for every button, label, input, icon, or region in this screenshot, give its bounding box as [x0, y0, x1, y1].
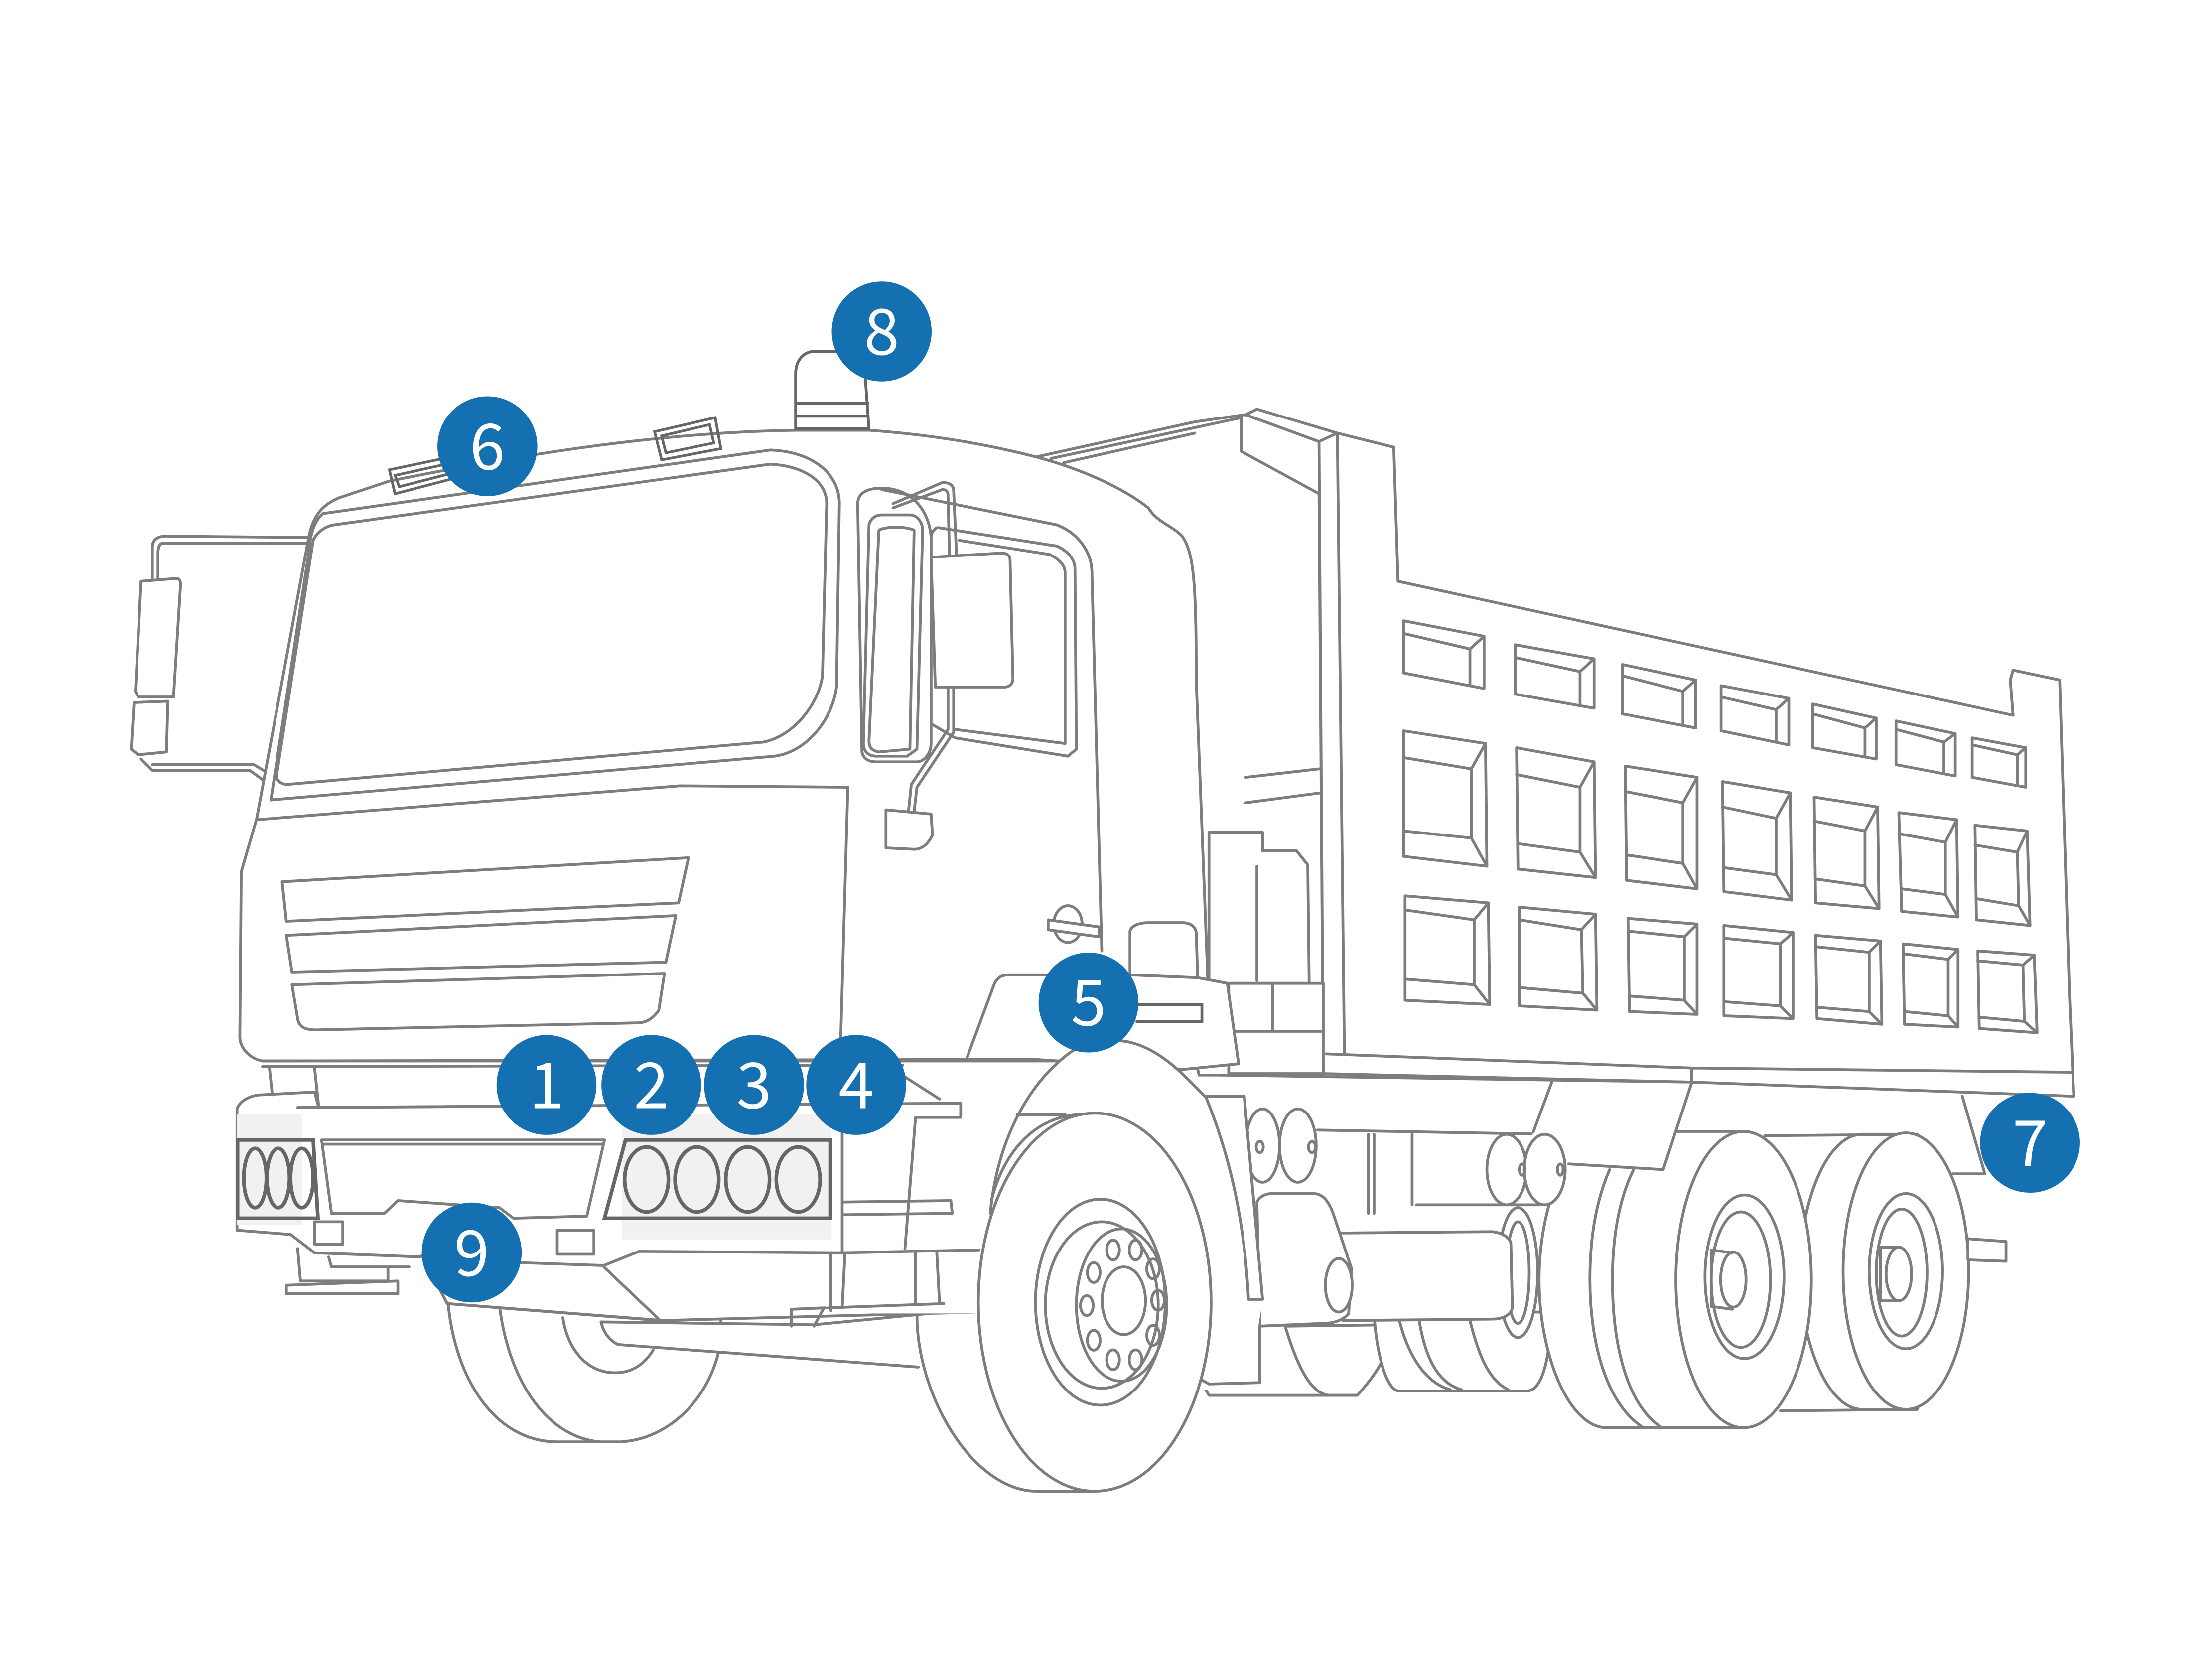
rear wheel B	[1765, 1133, 2006, 1411]
marker 8: 8	[864, 281, 899, 373]
left side mirror	[131, 536, 309, 782]
rear wheels	[1487, 1082, 2006, 1428]
roof beacon	[796, 351, 869, 429]
door mirror	[886, 482, 1013, 849]
beltline	[257, 786, 848, 820]
marker 3	[704, 1034, 804, 1135]
rear wheel A	[1487, 1082, 1811, 1428]
front wheel and fender	[917, 1040, 1262, 1491]
axle tanks	[1487, 1134, 1565, 1205]
marker 9	[422, 1202, 522, 1302]
marker 3: 3	[736, 1034, 772, 1126]
marker 1: 1	[529, 1034, 564, 1126]
left headlight panel	[237, 1114, 318, 1225]
body windows	[1403, 621, 2037, 1033]
marker 7: 7	[2012, 1092, 2048, 1184]
marker 4: 4	[838, 1034, 874, 1126]
door window	[931, 528, 1077, 756]
centre grille panel	[322, 1140, 604, 1218]
marker 8	[832, 281, 932, 382]
marker 2: 2	[634, 1034, 669, 1126]
engine cover box and lever	[967, 923, 1239, 1069]
windshield	[271, 450, 839, 800]
marker 7	[1980, 1092, 2080, 1193]
marker 6: 6	[470, 396, 505, 488]
tank and step box behind cab	[1209, 833, 1323, 1074]
marker 2	[601, 1034, 701, 1135]
far front wheel	[447, 1291, 721, 1442]
right headlight panel	[604, 1114, 831, 1240]
cab bottom rail	[263, 1060, 1037, 1067]
white cover behind front tyre	[842, 1102, 983, 1313]
marker 6	[437, 396, 538, 496]
marker 5	[1039, 952, 1138, 1053]
roof marker lights	[390, 417, 721, 494]
marker 1	[497, 1034, 596, 1135]
cab	[240, 430, 1209, 1108]
rear mudguard	[1952, 1096, 1985, 1174]
front bumper	[237, 1077, 983, 1367]
step	[286, 1249, 660, 1321]
cab lower strut	[270, 1068, 319, 1108]
dump body	[1035, 409, 2074, 1096]
marker 5: 5	[1071, 952, 1106, 1044]
door handle	[1048, 906, 1099, 943]
undercarriage	[1199, 1109, 1552, 1395]
grille slats	[282, 858, 689, 1030]
marker 9: 9	[454, 1202, 489, 1294]
marker 4	[806, 1034, 906, 1135]
chassis bracket	[1523, 1082, 1691, 1170]
bumper fog squares	[314, 1222, 594, 1254]
hub	[1035, 1199, 1167, 1405]
door	[841, 490, 1102, 1061]
